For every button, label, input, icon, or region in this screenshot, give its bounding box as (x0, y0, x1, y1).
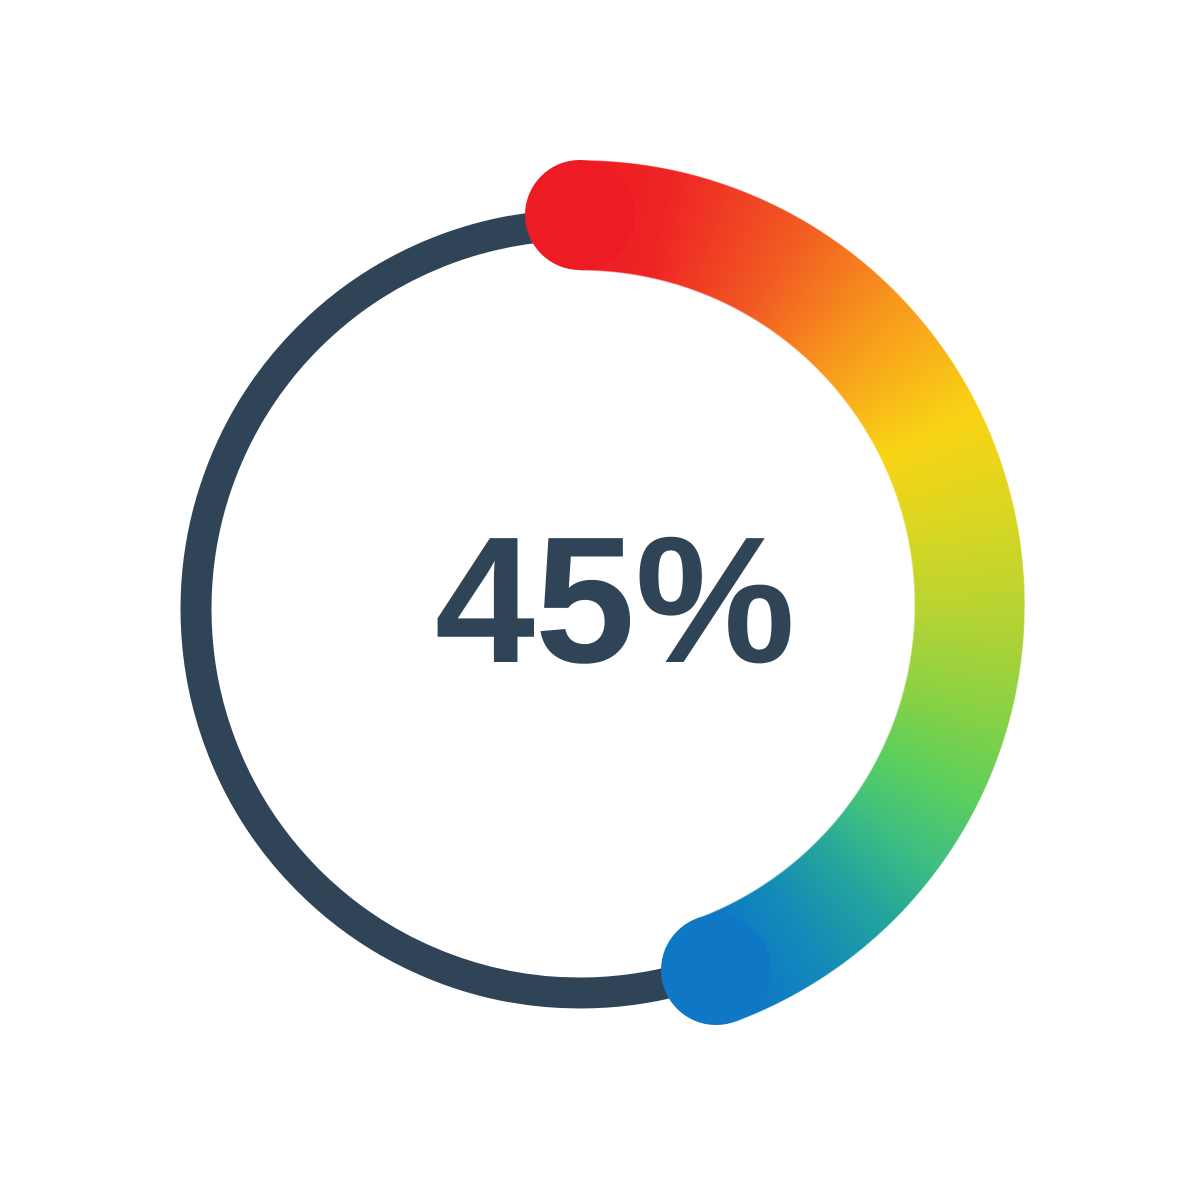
percentage value: 45% (435, 500, 795, 701)
arc end cap (blue) (661, 915, 771, 1025)
arc start cap (red) (525, 160, 635, 270)
gradient progress arc (580, 160, 1025, 1022)
